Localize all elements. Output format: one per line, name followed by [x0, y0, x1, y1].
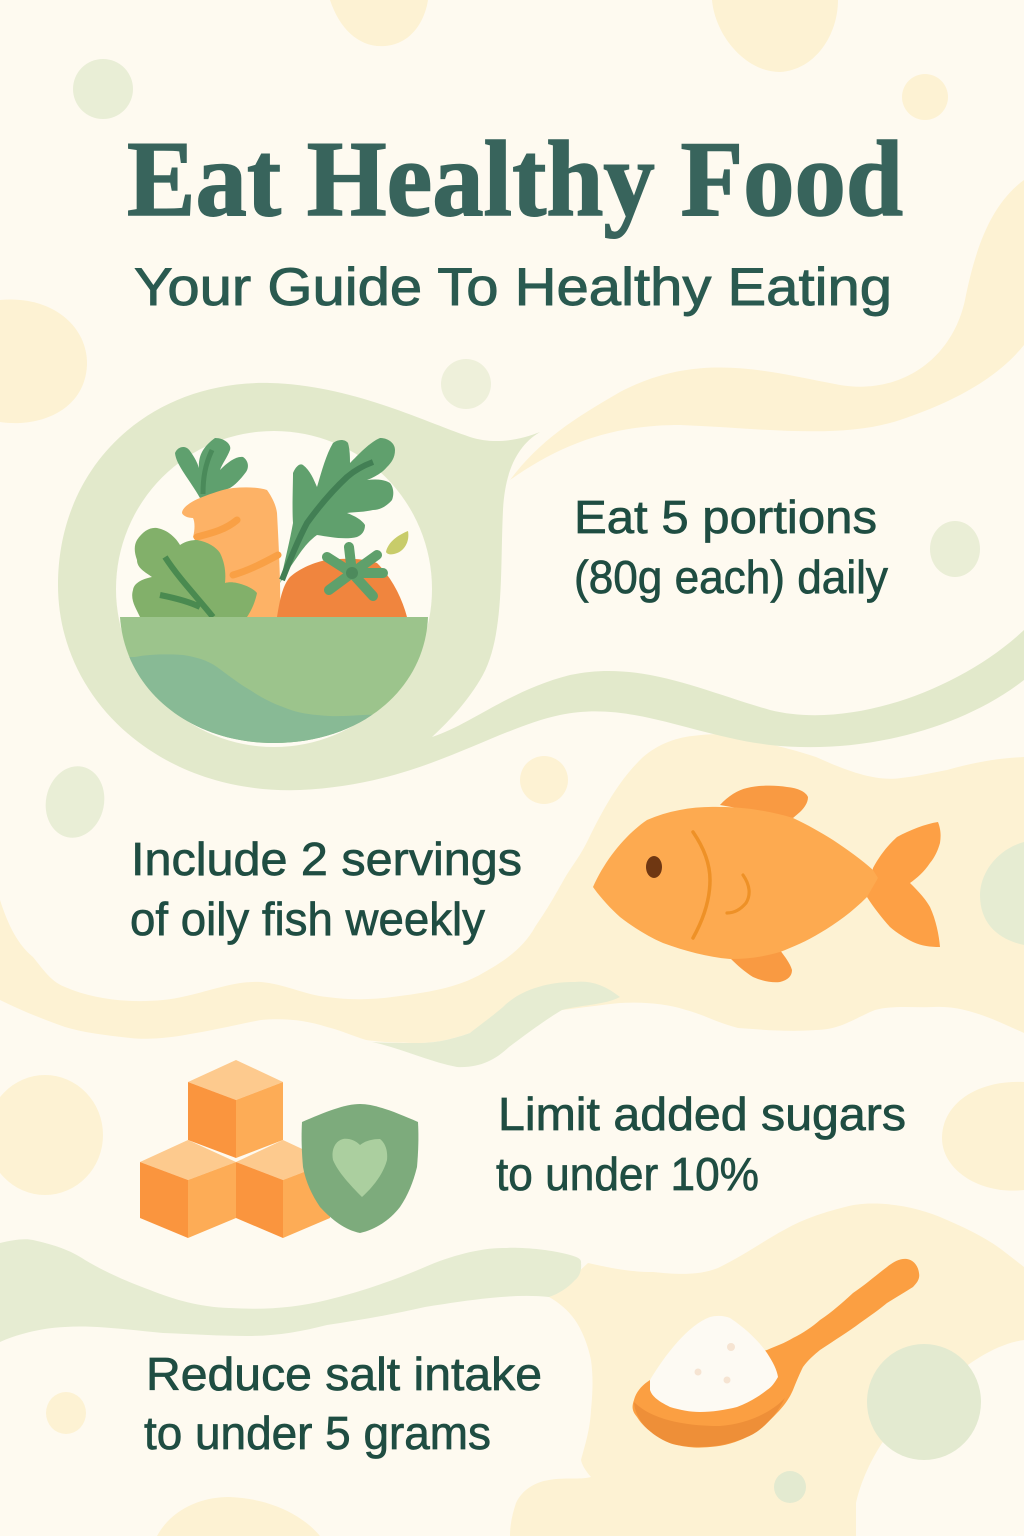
text: portions tip: Eat 5 portions — [574, 491, 877, 543]
right cube — [236, 1140, 330, 1238]
heading: subtitle: Your Guide To Healthy Eating — [134, 258, 892, 317]
left leafy green — [132, 528, 257, 617]
icon: vegetable bowl — [120, 438, 428, 743]
top cube — [188, 1060, 283, 1158]
tomato — [277, 559, 407, 617]
text: sugar tip: to under 10% — [496, 1148, 759, 1200]
white circle behind food — [116, 431, 432, 747]
tomato calyx — [327, 547, 383, 596]
right leafy stem — [280, 438, 395, 583]
small bud — [386, 531, 408, 554]
text: sugar tip: Limit added sugars — [498, 1088, 906, 1140]
fish eye — [646, 856, 662, 878]
text: salt tip: to under 5 grams — [144, 1407, 491, 1459]
spoon — [633, 1259, 919, 1448]
text: portions tip: (80g each) daily — [574, 551, 888, 603]
panel: vegetable section — [58, 383, 1024, 790]
heart — [332, 1139, 387, 1197]
icon: fish — [593, 786, 941, 982]
left cube — [140, 1140, 236, 1238]
bowl wave — [130, 654, 372, 743]
text: fish tip: Include 2 servings — [131, 833, 522, 885]
bowl — [120, 617, 428, 743]
heading: title: Eat Healthy Food — [127, 120, 903, 239]
shield — [302, 1104, 418, 1233]
text: fish tip: of oily fish weekly — [130, 893, 485, 945]
salt pile — [650, 1316, 778, 1412]
carrot — [182, 487, 280, 617]
spoon shadow — [634, 1398, 785, 1447]
fish gill — [693, 832, 710, 938]
left carrot leaves — [175, 438, 248, 498]
icon: sugar cubes and shield — [140, 1060, 418, 1238]
icon: salt spoon — [633, 1259, 919, 1448]
green bubble — [58, 383, 1024, 790]
text: salt tip: Reduce salt intake — [146, 1348, 542, 1400]
